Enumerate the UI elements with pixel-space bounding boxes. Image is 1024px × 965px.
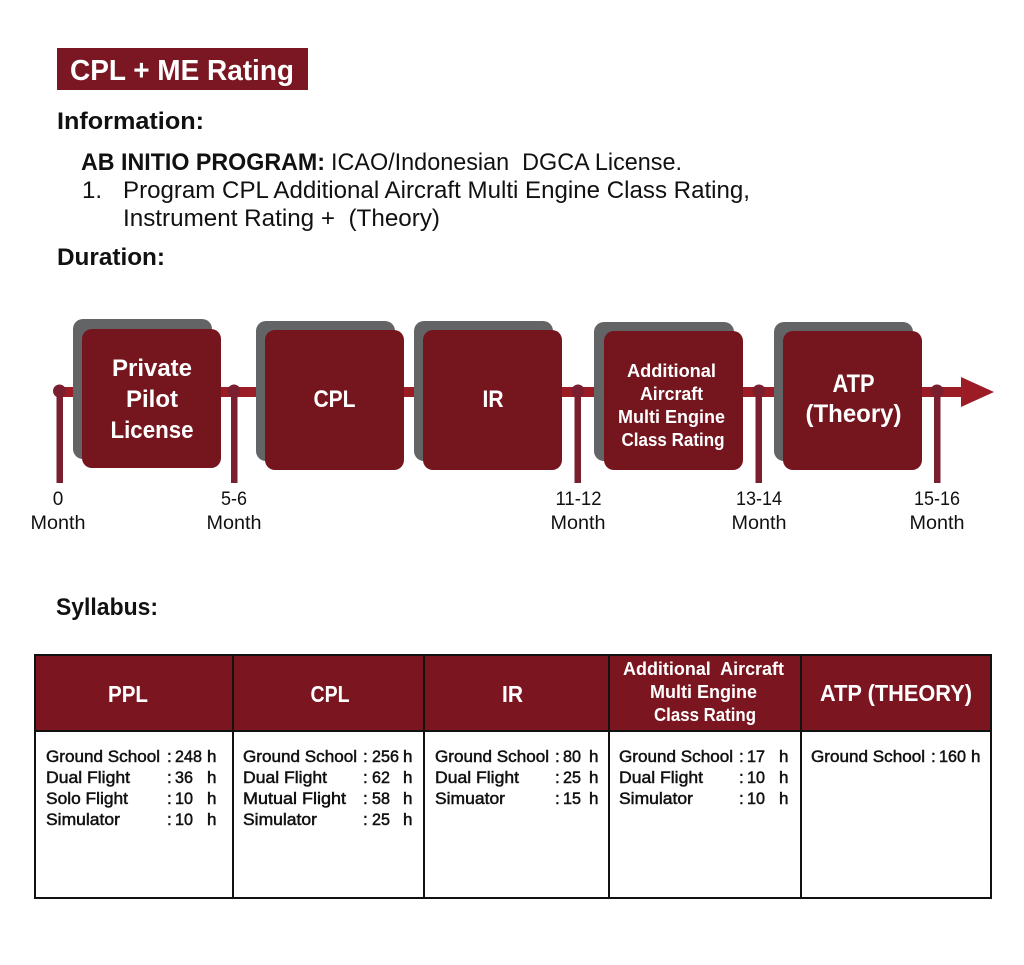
column: cpl: CPL xyxy=(310,681,350,707)
column: ppl: 10 xyxy=(175,810,193,829)
box: private pilot license: License xyxy=(110,417,194,444)
column: ppl: Ground School xyxy=(46,747,160,766)
column: additional aircraft multi engine class rating xyxy=(619,659,788,808)
title: CPL + ME Rating xyxy=(70,55,294,87)
column: cpl: Simulator xyxy=(243,810,317,829)
timeline arrow xyxy=(59,377,994,407)
milestone: 13-14 month xyxy=(732,384,786,534)
column: cpl: 62 xyxy=(372,768,390,787)
box: additional aircraft multi engine class rating xyxy=(594,322,743,470)
milestone: 13-14 month: 13-14 xyxy=(736,489,782,510)
column: ir: h xyxy=(589,747,598,766)
milestone: 11-12 month xyxy=(550,384,606,534)
column: ppl: : xyxy=(167,810,172,829)
milestone: 0 month: Month xyxy=(30,513,86,534)
box: private pilot license: Pilot xyxy=(126,386,178,413)
text block: program information: AB INITIO PROGRAM: xyxy=(81,149,325,176)
milestone: 15-16 month xyxy=(910,384,964,534)
column: ppl: : xyxy=(167,789,172,808)
column: cpl: h xyxy=(403,810,412,829)
column: additional aircraft multi engine class rating: : xyxy=(739,768,744,787)
column: cpl: : xyxy=(363,768,368,787)
box: private pilot license: Private xyxy=(112,355,192,382)
text block: program information: ICAO/Indonesian DGCA License. xyxy=(331,149,682,176)
column: ppl: : xyxy=(167,768,172,787)
timeline chart xyxy=(30,319,994,534)
column: ir: Dual Flight xyxy=(435,768,519,787)
column: ppl: Solo Flight xyxy=(46,789,128,808)
text block: program information: Program CPL Additional Aircraft Multi Engine Class Rating, xyxy=(123,177,750,204)
milestone: 0 month: 0 xyxy=(53,489,63,510)
column: additional aircraft multi engine class rating: Multi Engine xyxy=(650,682,757,702)
column: cpl: 58 xyxy=(372,789,390,808)
box: cpl xyxy=(256,321,404,470)
column: ir: Simuator xyxy=(435,789,505,808)
column: ir: : xyxy=(555,747,560,766)
column: ir xyxy=(435,681,598,808)
column: ppl: 10 xyxy=(175,789,193,808)
box: ir xyxy=(414,321,562,470)
milestone: 0 month xyxy=(30,384,86,534)
column: additional aircraft multi engine class rating: h xyxy=(779,747,788,766)
milestone: 5-6 month xyxy=(206,384,262,534)
column: ppl: : xyxy=(167,747,172,766)
column: additional aircraft multi engine class rating: : xyxy=(739,789,744,808)
column: ir: : xyxy=(555,768,560,787)
column: ppl: PPL xyxy=(108,681,148,707)
column: atp theory: h xyxy=(971,747,980,766)
column: cpl: : xyxy=(363,789,368,808)
heading: information: Information: xyxy=(57,108,204,135)
column: ir: IR xyxy=(502,681,523,707)
column: cpl: Ground School xyxy=(243,747,357,766)
column: ir: h xyxy=(589,768,598,787)
heading: syllabus: Syllabus: xyxy=(56,594,158,621)
column: additional aircraft multi engine class rating: Ground School xyxy=(619,747,733,766)
text block: program information: Instrument Rating + (Theory) xyxy=(123,205,440,232)
column: ppl: h xyxy=(207,789,216,808)
milestone: 15-16 month: Month xyxy=(910,513,964,534)
column: ir: h xyxy=(589,789,598,808)
column: atp theory: Ground School xyxy=(811,747,925,766)
column: ppl xyxy=(46,681,216,829)
column: ppl: h xyxy=(207,768,216,787)
text block: program information: 1. xyxy=(82,177,102,204)
column: additional aircraft multi engine class rating: Class Rating xyxy=(654,705,756,725)
column: ppl: 248 xyxy=(175,747,202,766)
text block: program information xyxy=(81,149,750,232)
column: additional aircraft multi engine class rating: : xyxy=(739,747,744,766)
column: cpl: : xyxy=(363,747,368,766)
box: atp theory: ATP xyxy=(832,370,874,398)
milestone: 11-12 month: Month xyxy=(550,513,606,534)
column: ppl: Dual Flight xyxy=(46,768,130,787)
column: cpl: : xyxy=(363,810,368,829)
column: ir: 25 xyxy=(563,768,581,787)
box: atp theory xyxy=(774,322,922,470)
box: cpl: CPL xyxy=(314,386,356,413)
column: cpl: Dual Flight xyxy=(243,768,327,787)
column: additional aircraft multi engine class rating: 17 xyxy=(747,747,765,766)
column: atp theory: ATP (THEORY) xyxy=(820,680,972,706)
column: ir: : xyxy=(555,789,560,808)
milestone: 11-12 month: 11-12 xyxy=(556,489,602,510)
column: cpl: h xyxy=(403,747,412,766)
column: ppl: h xyxy=(207,747,216,766)
column: additional aircraft multi engine class rating: h xyxy=(779,789,788,808)
column: atp theory: : xyxy=(931,747,936,766)
column: ir: 80 xyxy=(563,747,581,766)
column: additional aircraft multi engine class rating: h xyxy=(779,768,788,787)
column: cpl: h xyxy=(403,768,412,787)
column: cpl xyxy=(243,681,412,829)
column: additional aircraft multi engine class rating: Dual Flight xyxy=(619,768,703,787)
column: additional aircraft multi engine class rating: 10 xyxy=(747,768,765,787)
box: additional aircraft multi engine class rating: Class Rating xyxy=(622,430,724,450)
syllabus table xyxy=(35,655,991,898)
column: additional aircraft multi engine class rating: Additional Aircraft xyxy=(623,659,784,679)
box: ir: IR xyxy=(482,386,504,413)
column: ir: Ground School xyxy=(435,747,549,766)
column: additional aircraft multi engine class rating: 10 xyxy=(747,789,765,808)
column: cpl: 256 xyxy=(372,747,399,766)
column: ppl: Simulator xyxy=(46,810,120,829)
column: atp theory xyxy=(811,680,980,766)
column: ppl: 36 xyxy=(175,768,193,787)
column: additional aircraft multi engine class rating: Simulator xyxy=(619,789,693,808)
column: cpl: Mutual Flight xyxy=(243,789,346,808)
box: private pilot license xyxy=(73,319,221,468)
column: ir: 15 xyxy=(563,789,581,808)
box: additional aircraft multi engine class rating: Multi Engine xyxy=(618,407,725,427)
milestone: 13-14 month: Month xyxy=(732,513,786,534)
column: cpl: 25 xyxy=(372,810,390,829)
box: additional aircraft multi engine class rating: Additional xyxy=(627,361,716,381)
column: atp theory: 160 xyxy=(939,747,966,766)
column: cpl: h xyxy=(403,789,412,808)
heading: duration: Duration: xyxy=(57,244,165,271)
box: additional aircraft multi engine class rating: Aircraft xyxy=(640,384,703,404)
milestone: 5-6 month: Month xyxy=(206,513,262,534)
box: atp theory: (Theory) xyxy=(806,400,902,428)
milestone: 5-6 month: 5-6 xyxy=(221,489,247,510)
milestone: 15-16 month: 15-16 xyxy=(914,489,960,510)
column: ppl: h xyxy=(207,810,216,829)
